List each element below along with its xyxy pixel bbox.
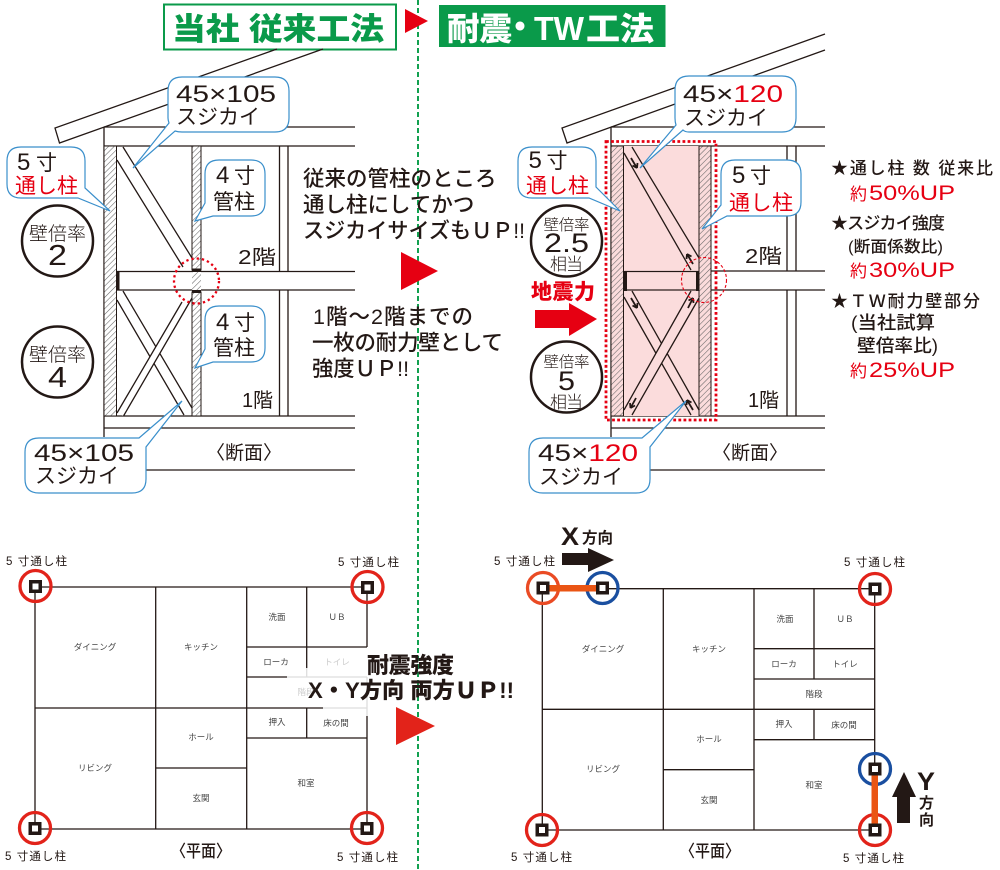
title: TW method xyxy=(439,5,666,47)
callout: 45x105 top: スジカイ xyxy=(176,106,260,129)
title arrow xyxy=(405,9,428,33)
badge: wall ratio 2.5: 壁倍率 xyxy=(544,216,590,234)
middle text lower: 強度ＵＰ!! xyxy=(312,357,409,381)
headline: seismic strength xyxy=(308,653,514,703)
benefit list: 30%UP xyxy=(869,259,955,282)
plan: TW: リビング xyxy=(586,764,620,774)
title: TW method: 工法 xyxy=(586,11,654,47)
badge: wall ratio 2: 壁倍率 xyxy=(29,223,86,245)
section diagram: current method xyxy=(55,49,355,470)
plan: TW: キッチン xyxy=(692,644,726,654)
floor labels: 2階 xyxy=(745,245,782,268)
plan: current: リビング xyxy=(78,763,112,773)
posts xyxy=(104,146,116,416)
column labels: TW plan: 5 寸通し柱 xyxy=(843,851,904,865)
label: Y direction: 向 xyxy=(919,812,934,829)
plan: TW: トイレ xyxy=(832,659,858,669)
plan: TW: ローカ xyxy=(771,659,797,669)
title: TW method: 耐震 xyxy=(447,11,512,47)
pink wall xyxy=(623,146,699,416)
benefit list: 50%UP xyxy=(869,182,955,205)
plan: current: ローカ xyxy=(263,657,289,667)
beam xyxy=(625,272,698,290)
benefit list: 25%UP xyxy=(869,359,955,382)
badge: wall ratio 4: 壁倍率 xyxy=(29,344,86,366)
column labels: TW plan: 5 寸通し柱 xyxy=(844,555,906,569)
plan: TW: 和室 xyxy=(805,780,823,790)
section diagram: TW method: 〈断面〉 xyxy=(712,442,788,464)
braces xyxy=(624,147,699,415)
plan: current: 押入 xyxy=(268,717,286,727)
plan: current xyxy=(35,587,367,861)
badge: wall ratio 2.5: 相当 xyxy=(550,255,583,274)
badge: wall ratio 2 xyxy=(22,206,93,276)
callout: 45x120 top: 45× 120 xyxy=(683,81,783,108)
center dashed divider xyxy=(417,0,419,870)
column labels: TW plan: 5 寸通し柱 xyxy=(494,554,556,568)
callout: 4 sun post upper: 管柱 xyxy=(213,191,255,214)
plan: TW: 玄関 xyxy=(700,795,718,805)
roof rafter xyxy=(55,49,323,143)
callout: 45x120 bottom: スジカイ xyxy=(539,466,623,489)
column marker: top right xyxy=(352,572,383,602)
arrow: middle red xyxy=(401,252,438,290)
benefit list: 約 xyxy=(850,185,867,204)
column marker: TW bottom left xyxy=(526,814,558,846)
middle text upper: 従来の管柱のところ xyxy=(303,167,497,191)
column markers with X direction link xyxy=(528,572,618,604)
small arrows xyxy=(630,158,694,410)
callout: 5 sun column: 通し柱 xyxy=(15,175,78,198)
benefit list: 約 xyxy=(850,262,867,281)
badge: wall ratio 5: 5 xyxy=(558,366,575,396)
floor labels: 2階 xyxy=(238,246,276,269)
callout: 45x105 top xyxy=(133,77,289,168)
plan: TW: 洗面 xyxy=(776,614,794,624)
benefit list: 約 xyxy=(850,362,867,381)
column labels: current plan: 5 寸通し柱 xyxy=(337,850,398,864)
title: TW method: TW xyxy=(534,10,585,47)
column markers with Y direction link xyxy=(860,754,890,846)
plan: TW: ホール xyxy=(696,734,722,744)
benefit list xyxy=(831,159,993,382)
benefit list: 壁倍率比) xyxy=(857,336,938,356)
title: current method: 当社 従来工法 xyxy=(172,12,384,47)
callout: 4 sun post lower: 4寸 xyxy=(216,309,255,336)
plan: TW: 階段 xyxy=(805,689,823,699)
callout: 5 sun column right: 通し柱 xyxy=(729,192,793,215)
label: X direction: 方向 xyxy=(582,528,613,547)
column marker: TW top right xyxy=(860,574,890,604)
badge: wall ratio 4: 4 xyxy=(48,362,67,394)
badge: wall ratio 5 xyxy=(531,342,602,412)
arrow: plan red xyxy=(396,707,435,745)
middle text lower: 1階～2階までの xyxy=(313,305,473,329)
benefit list: ★通し柱 数 従来比 xyxy=(831,159,993,178)
badge: wall ratio 5: 壁倍率 xyxy=(544,353,590,371)
plan: current: 床の間 xyxy=(323,718,349,728)
headline: seismic strength: 耐震強度 xyxy=(367,653,454,678)
section diagram: current method: 1階 xyxy=(242,389,273,412)
callout: 5 sun column left xyxy=(518,147,620,211)
callout: 45x120 bottom xyxy=(529,401,686,493)
posts xyxy=(611,146,624,416)
callout: 45x120 bottom: 45× 120 xyxy=(538,440,638,467)
column labels: current plan xyxy=(5,554,400,864)
middle text upper xyxy=(303,167,525,243)
room labels: ダイニング xyxy=(74,642,117,652)
middle text lower xyxy=(312,305,503,381)
callout: 45x105 bottom: 45×105 xyxy=(34,440,134,467)
label: X direction: X xyxy=(561,523,579,551)
middle text lower: 一枚の耐力壁として xyxy=(312,331,503,355)
arrow: X direction xyxy=(562,548,614,572)
badge: wall ratio 2.5 xyxy=(531,206,602,276)
frame lines xyxy=(104,127,355,470)
plan: TW: 押入 xyxy=(775,719,793,729)
caption: 〈平面〉 xyxy=(171,842,231,861)
benefit list: (当社試算 xyxy=(851,313,935,333)
label: X direction xyxy=(561,523,613,551)
caption: 〈平面〉 xyxy=(680,842,740,861)
callout: 4 sun post lower: 管柱 xyxy=(213,337,255,360)
middle text upper: スジカイサイズもＵＰ!! xyxy=(303,219,525,243)
callout: 45x105 top: 45×105 xyxy=(176,81,276,108)
callout: 5 sun column right: 5寸 xyxy=(732,162,771,189)
callout: 45x120 top xyxy=(640,76,796,168)
badge: wall ratio 2.5: 2.5 xyxy=(544,228,589,258)
roof rafter xyxy=(562,34,825,143)
section diagram: TW method: 1階 xyxy=(748,389,779,412)
callout: 5 sun column xyxy=(7,147,110,211)
room labels: ダイニング xyxy=(582,644,625,654)
plan: current: 洗面 xyxy=(268,612,286,622)
frame lines xyxy=(611,127,825,470)
callout: 5 sun column left: 通し柱 xyxy=(526,175,589,198)
section diagram: current method: 〈断面〉 xyxy=(206,442,282,464)
column marker: top left xyxy=(20,570,51,602)
section diagram: TW method xyxy=(562,34,825,470)
label: seismic force: 地震力 xyxy=(531,281,595,304)
red dotted frame xyxy=(606,142,716,420)
room walls xyxy=(542,589,875,830)
faded wall segments xyxy=(287,668,367,716)
callout: 5 sun column: 5 寸 xyxy=(17,149,57,176)
benefit list: ★ＴＷ耐力壁部分 xyxy=(831,292,980,311)
badge: wall ratio 4 xyxy=(22,326,93,398)
title: current method xyxy=(164,4,396,50)
callout: 4 sun post upper: 4寸 xyxy=(216,162,255,189)
badge: wall ratio 5: 相当 xyxy=(550,393,583,412)
callout: 4 sun post upper xyxy=(195,160,265,221)
plan: current: 階段 xyxy=(297,687,315,697)
callout: 45x105 bottom: スジカイ xyxy=(35,465,119,488)
red dotted circle xyxy=(174,258,219,304)
column marker: bottom left xyxy=(20,812,50,844)
column labels: TW plan: 5 寸通し柱 xyxy=(511,850,572,864)
callout: 45x105 bottom xyxy=(25,401,182,493)
callout: 45x120 top: スジカイ xyxy=(684,107,768,130)
arrow: Y direction xyxy=(892,772,916,823)
column marker: bottom right xyxy=(352,812,382,844)
headline: seismic strength: X・Y方向 両方ＵＰ!! xyxy=(308,678,514,703)
badge: wall ratio 2: 2 xyxy=(48,240,67,272)
callout: 5 sun column left: 5寸 xyxy=(528,147,568,174)
label: Y direction: 方 xyxy=(919,794,934,812)
braces xyxy=(117,147,192,415)
plan: TW xyxy=(542,589,875,861)
red dashed circle xyxy=(682,258,726,302)
middle text upper: 通し柱にしてかつ xyxy=(303,193,474,217)
arrow: seismic force xyxy=(535,303,597,336)
plan: current: ＵＢ xyxy=(328,612,346,622)
benefit list: ★スジカイ強度 xyxy=(831,214,945,233)
label: Y direction: Y xyxy=(917,768,935,796)
label: Y direction xyxy=(917,768,935,829)
plan: TW: ＵＢ xyxy=(836,614,854,624)
column labels: current plan: 5 寸通し柱 xyxy=(338,555,400,569)
plan: current: キッチン xyxy=(184,642,218,652)
room walls xyxy=(35,587,367,829)
plan: TW: 床の間 xyxy=(831,720,857,730)
title: TW method: ・ xyxy=(504,9,536,45)
plan: current: トイレ xyxy=(324,657,350,667)
column labels: current plan: 5 寸通し柱 xyxy=(6,554,68,568)
callout: 5 sun column right xyxy=(702,160,801,229)
column labels: TW plan xyxy=(494,554,906,865)
plan: current: 玄関 xyxy=(192,793,210,803)
benefit list: (断面係数比) xyxy=(848,238,943,256)
plan: current: ホール xyxy=(188,732,214,742)
callout: 4 sun post lower xyxy=(195,306,265,368)
column labels: current plan: 5 寸通し柱 xyxy=(5,849,66,863)
plan: current: 和室 xyxy=(297,778,315,788)
